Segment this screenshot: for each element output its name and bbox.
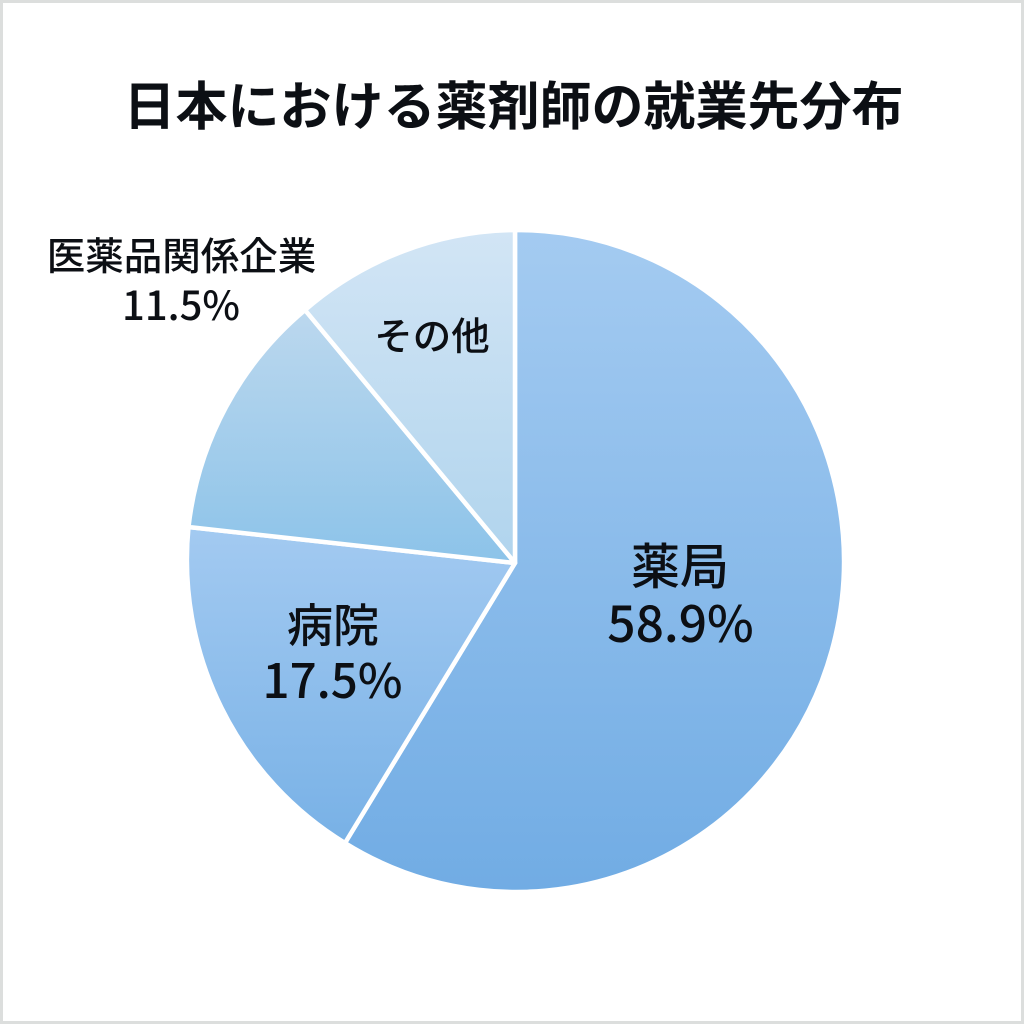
label: 病院: 17.5% [263,643,402,712]
label: 医薬品関係企業: 11.5% [122,274,240,332]
label: 病院 [263,590,402,712]
label: その他: その他 [374,306,490,362]
label: 病院: 病院 [287,590,379,656]
slice: 医薬品関係企業 11.5% [188,310,515,563]
label: 医薬品関係企業 [47,226,316,332]
title: 日本における薬剤師の就業先分布 [123,65,904,140]
pie chart [187,230,844,892]
slice: 病院 17.5% [187,527,515,843]
label: 薬局: 58.9% [607,585,754,657]
label: 薬局 [607,528,754,657]
slice: その他 [305,230,515,563]
label: 医薬品関係企業: 医薬品関係企業 [47,226,316,282]
label: 薬局: 薬局 [631,528,729,599]
slice: 薬局 58.9% [345,230,844,892]
